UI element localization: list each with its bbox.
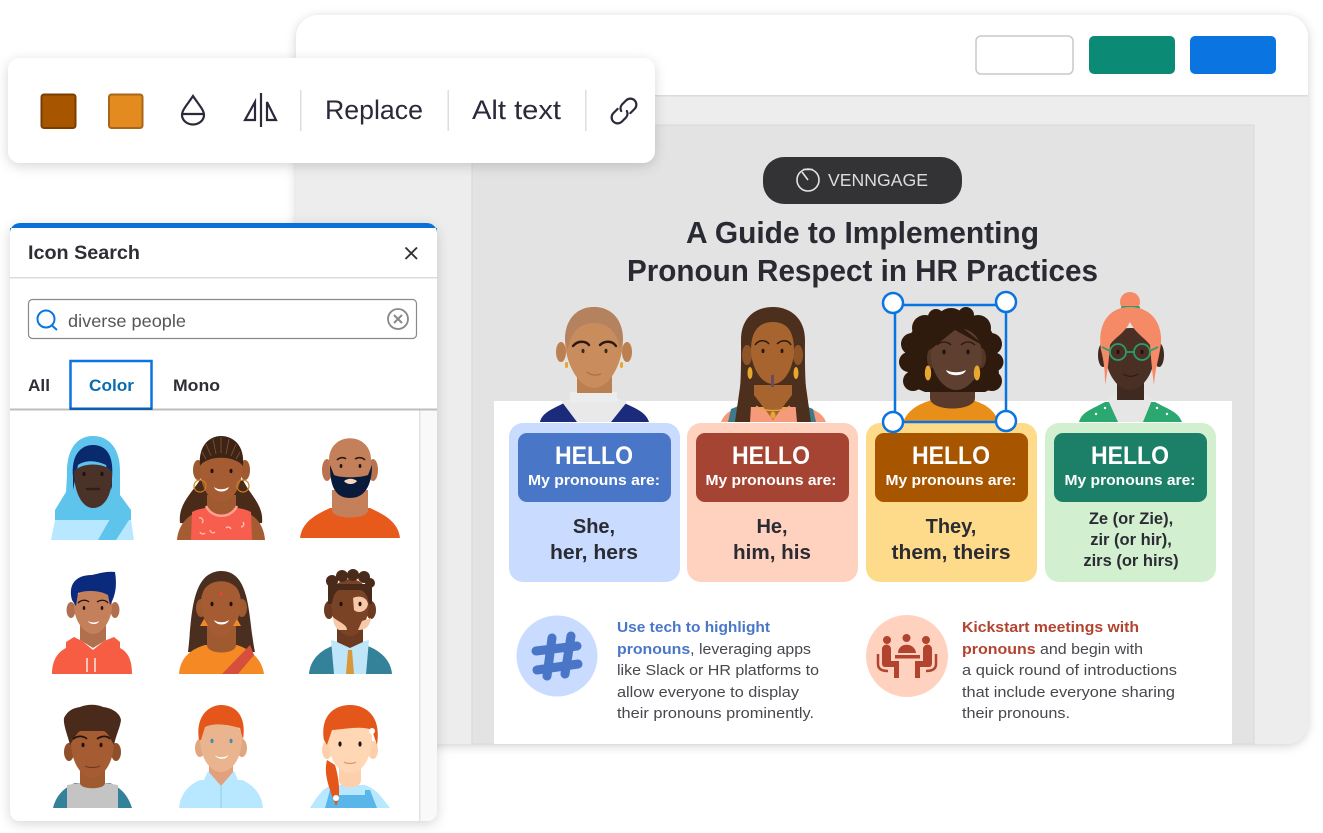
text: use tech: like Slack or HR platforms to	[617, 663, 819, 679]
search box	[28, 300, 416, 338]
card: he him his: HELLO	[732, 442, 810, 470]
panel: icon search	[10, 223, 437, 821]
person: ze zir	[1079, 292, 1182, 422]
panel: toolbar	[8, 58, 655, 163]
card: he him his	[687, 423, 858, 582]
replace label: Replace	[325, 95, 423, 125]
icon: close	[406, 248, 417, 259]
search box: diverse people	[68, 311, 186, 331]
text: kickstart meetings: their pronouns.	[962, 706, 1070, 722]
card: she her hers: My pronouns are:	[528, 472, 660, 489]
card: he him his: My pronouns are:	[706, 472, 836, 489]
person: vitiligo	[309, 569, 392, 674]
person: red hair shirt	[179, 705, 263, 808]
text: use tech: their pronouns prominently.	[617, 706, 814, 722]
text: kickstart meetings: Kickstart meetings with	[962, 620, 1139, 636]
card: ze zir zirs: HELLO	[1091, 442, 1169, 470]
person: long hair	[179, 571, 264, 674]
card: she her hers	[509, 423, 680, 582]
logo pill	[763, 157, 962, 204]
swatch: dark orange	[42, 94, 76, 128]
title: A Guide to Implementing	[686, 215, 1039, 250]
card: they them theirs: them, theirs	[892, 542, 1010, 564]
swatch: light orange	[109, 94, 142, 128]
person: hoodie	[52, 572, 132, 674]
text: use tech: Use tech to highlight	[617, 620, 770, 636]
icon: hash	[516, 616, 598, 696]
text: kickstart meetings: that include everyone sharing	[962, 685, 1175, 701]
card: she her hers: her, hers	[550, 542, 638, 564]
person: curly top	[53, 705, 132, 808]
card: ze zir zirs: Ze (or Zie),	[1089, 510, 1173, 528]
selection box	[883, 292, 1016, 432]
card: ze zir zirs: zirs (or hirs)	[1083, 552, 1179, 570]
panel: infographic canvas	[472, 125, 1254, 744]
card: ze zir zirs	[1045, 423, 1216, 582]
person: he him	[721, 307, 826, 422]
tabs: Mono	[173, 376, 220, 395]
title: Pronoun Respect in HR Practices	[627, 253, 1098, 288]
tabs: Color	[89, 376, 134, 395]
text: use tech: allow everyone to display	[617, 685, 800, 701]
person: she her	[540, 307, 649, 422]
person: they them (selected)	[899, 307, 1004, 422]
card: they them theirs: HELLO	[912, 442, 990, 470]
icon: meeting	[866, 615, 948, 697]
text: kickstart meetings: a quick round of introductions	[962, 663, 1177, 679]
icon: opacity drop	[182, 96, 204, 125]
button: white	[976, 36, 1073, 74]
panel title: Icon Search	[28, 243, 140, 264]
person: braids	[177, 436, 265, 540]
panel: editor window	[296, 15, 1308, 744]
person: bearded	[300, 438, 400, 538]
button: blue	[1190, 36, 1276, 74]
title	[627, 215, 1098, 288]
logo pill: VENNGAGE	[828, 170, 928, 190]
text: use tech	[617, 620, 819, 722]
card: ze zir zirs: zir (or hir),	[1090, 531, 1172, 549]
card: he him his: He,	[756, 516, 788, 538]
card: they them theirs	[866, 423, 1037, 582]
tabs	[10, 361, 437, 410]
card: he him his: him, his	[733, 542, 811, 564]
alt text label: Alt text	[472, 95, 562, 125]
text: kickstart meetings: pronouns and begin with	[962, 642, 1143, 658]
icon: link	[609, 96, 639, 126]
button: green	[1089, 36, 1175, 74]
card: ze zir zirs: My pronouns are:	[1064, 472, 1196, 489]
person: headscarf	[51, 436, 134, 540]
card: they them theirs: My pronouns are:	[886, 472, 1016, 489]
text: kickstart meetings	[962, 620, 1177, 722]
card: they them theirs: They,	[926, 516, 976, 538]
text: use tech: pronouns , leveraging apps	[617, 642, 811, 658]
card: she her hers: She,	[573, 516, 615, 538]
tabs: All	[28, 376, 50, 395]
person: red hair braid	[310, 705, 390, 808]
card: she her hers: HELLO	[555, 442, 633, 470]
icon: flip	[245, 93, 276, 127]
